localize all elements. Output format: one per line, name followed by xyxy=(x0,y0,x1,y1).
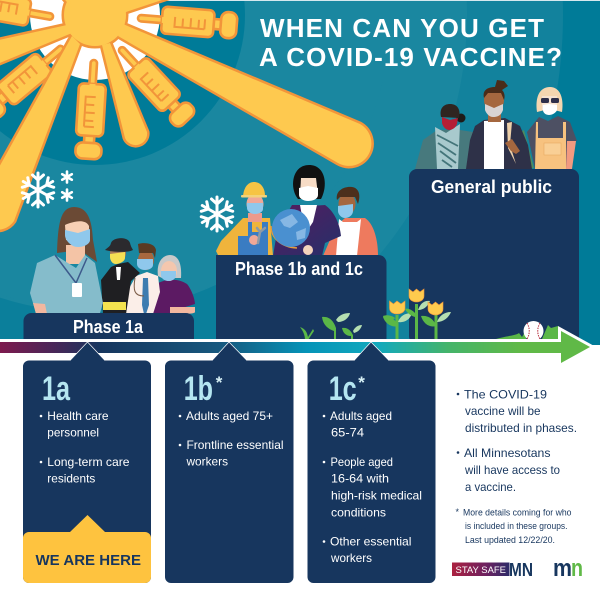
list: 1a groups: residents xyxy=(47,472,95,486)
people: phase 1a group xyxy=(30,207,195,314)
card: phase 1c xyxy=(308,342,436,583)
logo: Minnesota mn: n xyxy=(571,555,583,582)
logo: Stay Safe MN xyxy=(452,560,533,580)
logo: Stay Safe MN: STAY SAFE xyxy=(456,565,506,576)
list: 1c groups xyxy=(323,409,422,565)
grocery worker in coral cardigan xyxy=(323,187,378,256)
card: phase 1a xyxy=(23,342,151,583)
number: 1a: 1a xyxy=(42,370,71,408)
list: 1c groups: People aged xyxy=(330,455,393,469)
people: phase 1b and 1c group xyxy=(216,165,378,256)
icon: sprouts xyxy=(300,313,362,340)
list: 1c groups: 16-64 with xyxy=(331,472,389,486)
card: phase 1b xyxy=(165,342,294,583)
nurse xyxy=(30,207,103,314)
text block: key points: All Minnesotans xyxy=(464,446,550,460)
footnote: More details coming for who xyxy=(463,508,572,518)
icon: baseball in grass xyxy=(496,321,558,341)
text block: key points: a vaccine. xyxy=(465,480,516,494)
title xyxy=(259,13,562,72)
list: 1b groups: workers xyxy=(186,455,228,469)
text block: key points xyxy=(457,387,577,494)
icon: snowflakes xyxy=(21,172,234,231)
elder patient xyxy=(152,255,195,314)
heading: General public: General public xyxy=(431,177,552,197)
text block: key points: distributed in phases. xyxy=(465,421,577,435)
doctor xyxy=(126,243,160,314)
list: 1a groups: Long-term care xyxy=(47,455,130,469)
list: 1b groups: Frontline essential xyxy=(186,438,284,452)
man with backpack strap xyxy=(466,80,534,169)
firefighter xyxy=(101,238,140,314)
heading: Phase 1b and 1c: Phase 1b and 1c xyxy=(235,259,363,279)
title: WHEN CAN YOU GET xyxy=(260,13,544,43)
arrow: phase timeline xyxy=(0,331,590,363)
list: 1c groups: 65-74 xyxy=(331,426,364,440)
list: 1a groups: personnel xyxy=(47,426,99,440)
list: 1c groups: Adults aged xyxy=(330,409,392,423)
panel: Phase 1a xyxy=(24,313,194,339)
list: 1a groups xyxy=(40,409,130,486)
list: 1c groups: high-risk medical xyxy=(331,489,422,503)
list: 1b groups xyxy=(179,409,284,469)
footnote xyxy=(456,507,572,545)
icon: syringes radiating from the sun xyxy=(0,0,238,160)
construction worker xyxy=(216,182,273,256)
list: 1c groups: workers xyxy=(330,551,372,565)
heading: Phase 1a: Phase 1a xyxy=(73,317,144,337)
teacher xyxy=(273,165,341,256)
text block: key points: The COVID-19 xyxy=(464,387,547,401)
people: general public group xyxy=(415,80,577,169)
logo: Minnesota mn: m xyxy=(553,555,572,582)
callout: we are here: WE ARE HERE xyxy=(36,552,141,569)
text block: key points: vaccine will be xyxy=(465,404,541,418)
panel: General public xyxy=(409,169,579,344)
list: 1a groups: Health care xyxy=(47,409,109,423)
icon: sun with rays xyxy=(0,0,371,230)
icon: tulips xyxy=(383,289,451,339)
footnote: Last updated 12/22/20. xyxy=(465,535,555,545)
panel: Phase 1b and 1c xyxy=(216,255,386,339)
logo: Stay Safe MN: MN xyxy=(509,560,533,580)
woman with sunglasses and overalls xyxy=(527,87,577,169)
title: A COVID-19 VACCINE? xyxy=(259,42,562,72)
text block: key points: will have access to xyxy=(464,463,560,477)
asterisk: * xyxy=(358,373,365,392)
asterisk: * xyxy=(216,373,223,392)
number: 1c: 1c xyxy=(329,370,357,408)
list: 1c groups: Other essential xyxy=(330,535,412,549)
white lower page area xyxy=(0,326,600,600)
footnote: is included in these groups. xyxy=(465,521,568,531)
number: 1b: 1b xyxy=(184,370,213,408)
woman with red mask and scarf xyxy=(415,104,473,169)
list: 1b groups: Adults aged 75+ xyxy=(186,409,273,423)
footnote: * xyxy=(456,507,460,517)
callout: we are here xyxy=(23,515,151,583)
globe xyxy=(271,209,313,255)
icon: white disc behind the sun xyxy=(30,0,160,80)
list: 1c groups: conditions xyxy=(331,506,386,520)
